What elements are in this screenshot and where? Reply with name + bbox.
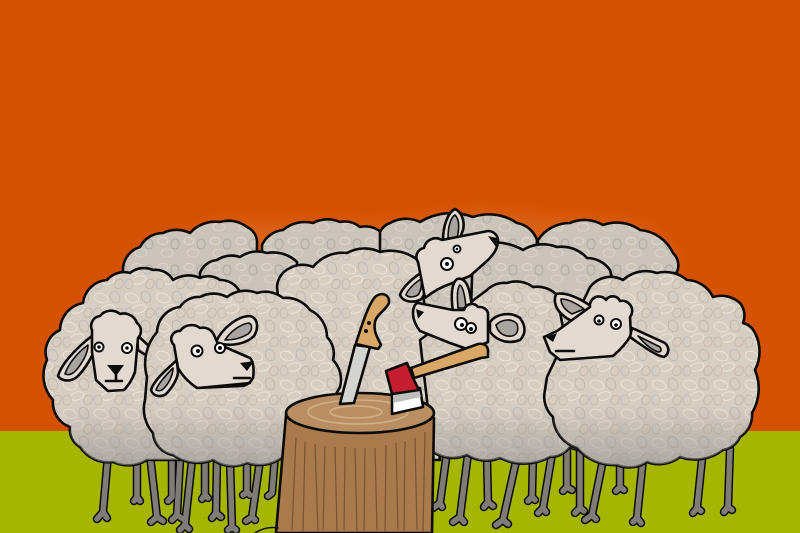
grass tuft — [255, 528, 278, 533]
sheep head: left facing front — [58, 311, 150, 391]
sheep head: second facing right — [151, 316, 257, 396]
sheep head: right looking left — [544, 294, 668, 360]
sheep head: top middle — [400, 209, 498, 302]
second sheep body — [144, 291, 341, 466]
right sheep body — [544, 271, 760, 467]
axe head — [386, 363, 423, 414]
axe handle — [411, 344, 488, 378]
left sheep body — [43, 268, 240, 465]
back sheep bodies — [123, 213, 678, 340]
sheep legs — [97, 449, 732, 530]
knife — [340, 294, 389, 404]
center right sheep body — [420, 281, 585, 464]
glow behind flock — [130, 212, 680, 300]
tree stump — [276, 393, 434, 533]
green ground — [0, 431, 800, 533]
sheep head: center looking left — [413, 279, 524, 350]
middle sheep body — [277, 248, 440, 460]
